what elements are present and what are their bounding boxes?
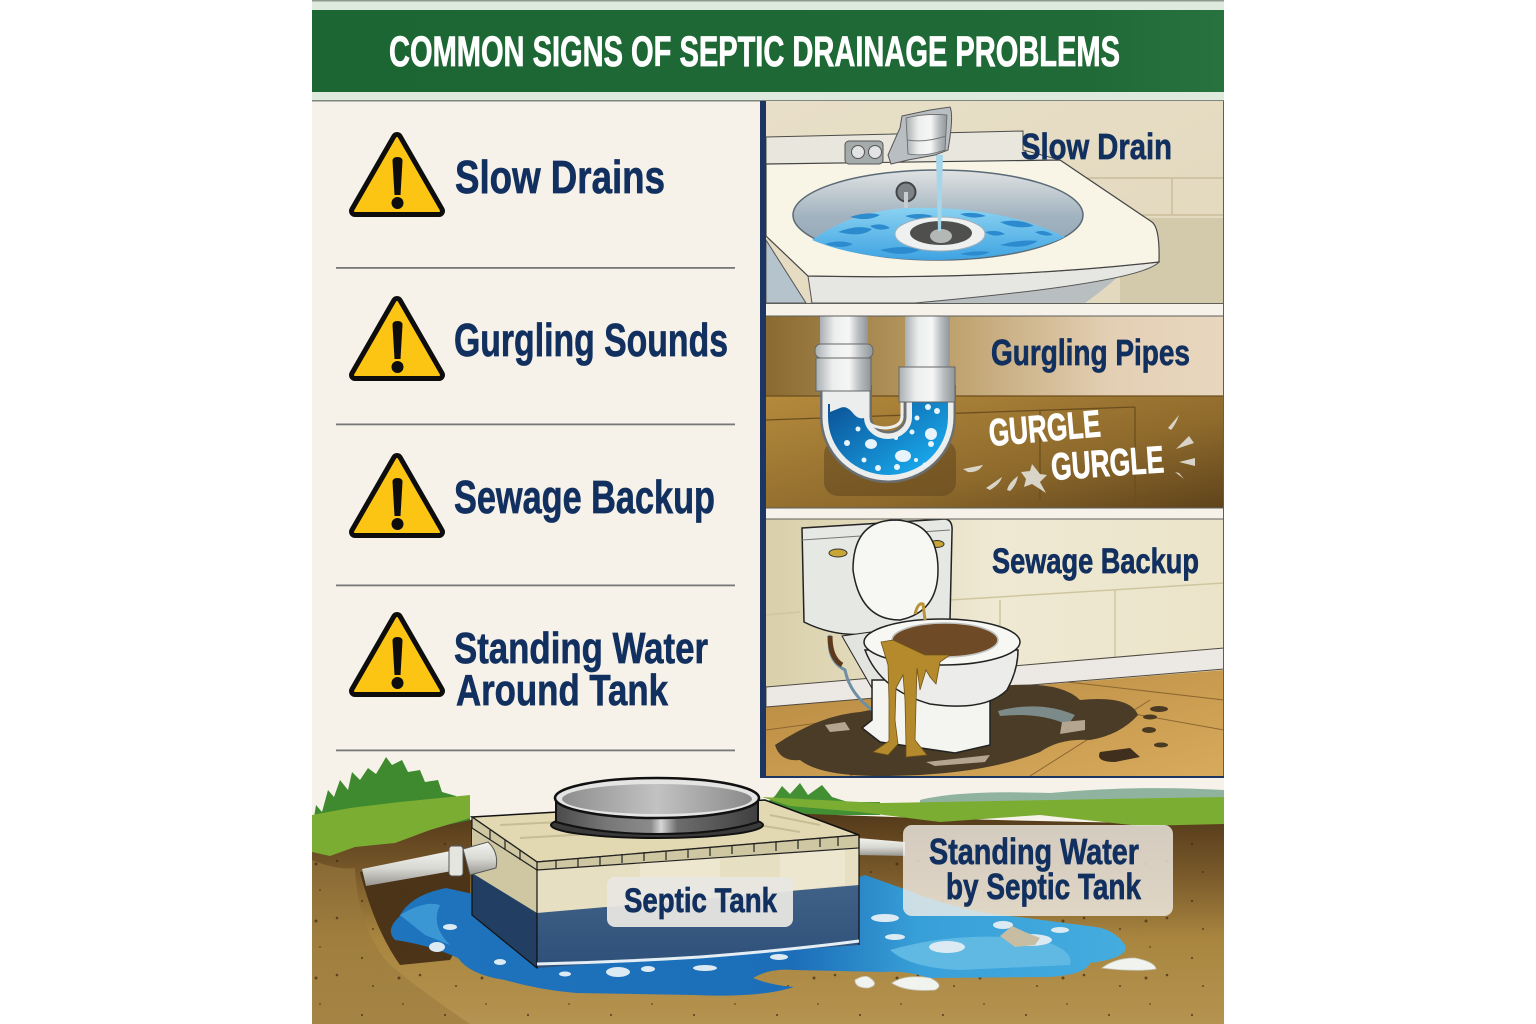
tank front face	[537, 835, 859, 968]
left pipe	[362, 842, 497, 886]
handles	[829, 549, 847, 557]
tank left face	[472, 820, 537, 968]
heading: slow drain: Slow Drain	[1021, 126, 1172, 167]
icon: warning triangle	[355, 618, 439, 691]
heading: gurgling pipes: Gurgling Pipes	[991, 332, 1190, 373]
panel: sewage backup	[766, 519, 1224, 776]
toilet	[802, 519, 1020, 757]
grass strip	[312, 795, 1224, 856]
sign: standing water	[355, 618, 708, 715]
dark soil shade	[360, 850, 470, 965]
foam patches	[429, 914, 1069, 977]
overflow knobs	[845, 141, 883, 164]
text: gurgle gurgle: GURGLE	[987, 403, 1102, 455]
left panel background	[312, 101, 1224, 861]
bowl	[865, 650, 1018, 706]
pipe trap	[815, 316, 955, 457]
water pool	[391, 875, 1126, 996]
icon: warning triangle	[355, 459, 439, 532]
sewage drip	[873, 640, 950, 757]
flush valve	[915, 604, 925, 620]
faucet	[888, 107, 952, 164]
sign: gurgling sounds	[355, 302, 728, 375]
panel: septic tank scene	[312, 757, 1224, 1024]
right pipe	[858, 838, 905, 856]
label: standing water by septic tank: Standing Water	[929, 831, 1139, 872]
label: standing water around tank: Standing Water	[454, 624, 708, 673]
bushes	[314, 757, 880, 826]
label: septic tank	[607, 877, 793, 927]
seat lid	[853, 520, 938, 620]
sink counter	[766, 160, 1159, 303]
hose	[829, 635, 875, 712]
panel edge lines	[766, 101, 1224, 776]
panel: gurgling pipes	[766, 316, 1224, 508]
soil foam blobs	[855, 958, 1156, 990]
label: standing water by septic tank: by Septic Tank	[946, 866, 1142, 907]
drain	[895, 217, 985, 251]
heading: sewage backup: Sewage Backup	[992, 542, 1199, 581]
label: slow drains: Slow Drains	[455, 151, 665, 203]
connector	[841, 631, 882, 688]
icon: warning triangle	[355, 138, 439, 211]
text: gurgle gurgle	[990, 410, 1164, 480]
label: gurgling sounds: Gurgling Sounds	[454, 314, 728, 366]
sewage puddle	[775, 685, 1138, 776]
label: standing water by septic tank	[903, 825, 1173, 916]
baseboard	[766, 648, 1224, 707]
floor	[766, 670, 1224, 776]
basin	[793, 170, 1083, 260]
label: standing water around tank: Around Tank	[456, 666, 668, 715]
tile edge	[472, 817, 859, 870]
backsplash ledge	[766, 131, 1060, 165]
label: septic tank: Septic Tank	[624, 882, 777, 920]
hills	[920, 788, 1224, 802]
sign: slow drains	[355, 138, 665, 211]
tank	[472, 778, 859, 968]
panel: sign list	[336, 138, 735, 751]
sign: sewage backup	[355, 459, 715, 532]
soil	[312, 812, 1224, 1024]
navy frame of right column	[760, 101, 1224, 778]
tank top face	[472, 800, 859, 862]
water bubbles	[844, 404, 940, 471]
overflow hole	[896, 182, 916, 208]
splash marks	[963, 415, 1195, 493]
sewage in bowl	[892, 623, 998, 657]
water in basin	[812, 208, 1065, 260]
water stream	[936, 155, 943, 231]
pedestal	[862, 680, 990, 753]
label: sewage backup: Sewage Backup	[454, 471, 715, 523]
text: gurgle gurgle: GURGLE	[1050, 439, 1165, 489]
title banner	[312, 0, 1224, 102]
lid	[551, 778, 763, 838]
debris	[1000, 926, 1040, 947]
icon: warning triangle	[355, 302, 439, 375]
toilet tank	[802, 519, 952, 634]
bowl rim	[864, 619, 1020, 665]
title: COMMON SIGNS OF SEPTIC DRAINAGE PROBLEMS	[389, 28, 1120, 76]
panel: slow drain	[766, 101, 1224, 303]
